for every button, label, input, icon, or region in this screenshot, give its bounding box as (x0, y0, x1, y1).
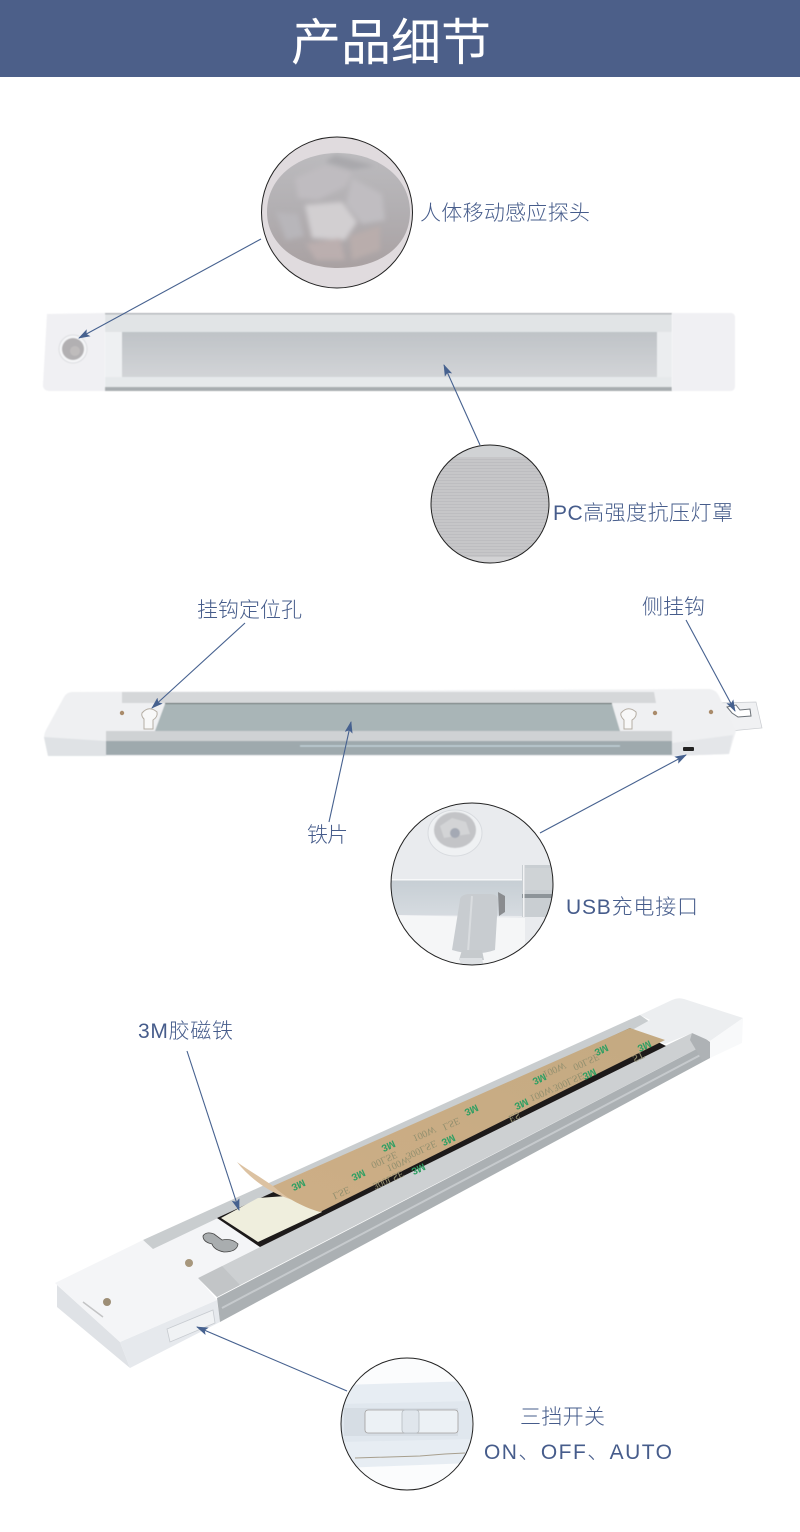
lamp body (44, 689, 736, 756)
screws (120, 710, 713, 715)
tape print: ES (506, 1109, 522, 1124)
tape print: 100W (541, 1059, 568, 1079)
lamp side body (57, 1285, 220, 1368)
tape print: 300LSE (404, 1137, 438, 1161)
tape print: LSE (331, 1184, 351, 1201)
keyhole left (142, 709, 157, 729)
arrow to side hook (686, 620, 735, 711)
callout: motion sensor detail (79, 135, 590, 338)
tape print: 3M (439, 1131, 457, 1147)
right end cap (672, 313, 735, 391)
tape print: 100W (385, 1153, 412, 1173)
panel: top view of lamp (43, 313, 735, 391)
tape print: 00LSE (571, 1050, 601, 1072)
tape print: 3M (512, 1095, 530, 1111)
tape print: 3M (635, 1037, 653, 1053)
peeled tape corner (237, 1162, 317, 1204)
arrow to usb port (540, 755, 686, 833)
hook slot (727, 705, 751, 717)
arrow to keyhole (152, 623, 245, 708)
usb port (683, 747, 694, 751)
header banner (0, 0, 800, 77)
3M label: 3M胶磁铁 (138, 1020, 233, 1043)
tape print: 300LSE (551, 1069, 585, 1093)
tape print: 3M (580, 1065, 598, 1081)
callout: USB charging port detail (390, 755, 698, 968)
usb label: USB充电接口 (566, 896, 698, 919)
switch label: 三挡开关 (520, 1406, 605, 1429)
panel: adhesive side of lamp (55, 998, 743, 1368)
keyhole right (621, 709, 636, 729)
top aluminium strip (122, 692, 656, 703)
switch photo circle (342, 1382, 472, 1468)
callout: three position switch detail (197, 1327, 672, 1492)
callout: PC lampshade detail (430, 365, 733, 564)
hook position label: 挂钩定位孔 (197, 599, 302, 622)
title: 产品细节 (291, 15, 491, 71)
hanging hook tab (716, 702, 762, 731)
aluminium body and lens cover (105, 313, 672, 391)
tape print: 3M (349, 1166, 367, 1182)
keyhole (203, 1233, 238, 1252)
tape print: 100W (411, 1123, 438, 1143)
tape print: 3M (379, 1137, 397, 1153)
exposed magnet surface (221, 1195, 322, 1242)
sensor photo circle (260, 135, 415, 290)
tape print: ST (630, 1049, 646, 1064)
screws and slot (83, 1259, 193, 1317)
left end cap with sensor (43, 313, 105, 391)
lampshade label: PC高强度抗压灯罩 (553, 502, 733, 525)
arrow to iron plate (329, 722, 351, 822)
far end cap (632, 998, 743, 1058)
front rail (198, 1033, 710, 1322)
arrow to magnet (187, 1051, 239, 1210)
back aluminium strip (143, 1015, 650, 1250)
lampshade photo circle (430, 444, 550, 564)
tape print (289, 1037, 653, 1201)
side hook label: 侧挂钩 (642, 596, 705, 619)
tape print: 3M (592, 1041, 610, 1057)
usb photo circle (390, 802, 555, 968)
sensor label: 人体移动感应探头 (420, 202, 590, 225)
tape print: 3M (530, 1070, 548, 1086)
tape print: 3M (289, 1176, 307, 1192)
front aluminium rail (106, 731, 672, 741)
near end plate and cap (55, 1218, 260, 1342)
panel: back view of lamp (44, 596, 762, 847)
iron plate (155, 704, 620, 731)
arrow to lampshade (444, 365, 480, 445)
arrow to sensor (79, 239, 261, 338)
switch modes label: ON、OFF、AUTO (484, 1441, 672, 1464)
tape print: LSE (441, 1115, 461, 1132)
tape print: 300LSE (371, 1167, 405, 1191)
iron sheet label: 铁片 (307, 824, 348, 847)
switch (167, 1310, 215, 1342)
tape print: 00LSE (369, 1148, 399, 1170)
tape print: 3M (409, 1160, 427, 1176)
arrow to switch (197, 1327, 347, 1391)
tape print: 100W (528, 1083, 555, 1103)
tape print: 3M (462, 1101, 480, 1117)
black magnetic strip (217, 1028, 666, 1247)
adhesive backing tape (273, 1028, 665, 1212)
